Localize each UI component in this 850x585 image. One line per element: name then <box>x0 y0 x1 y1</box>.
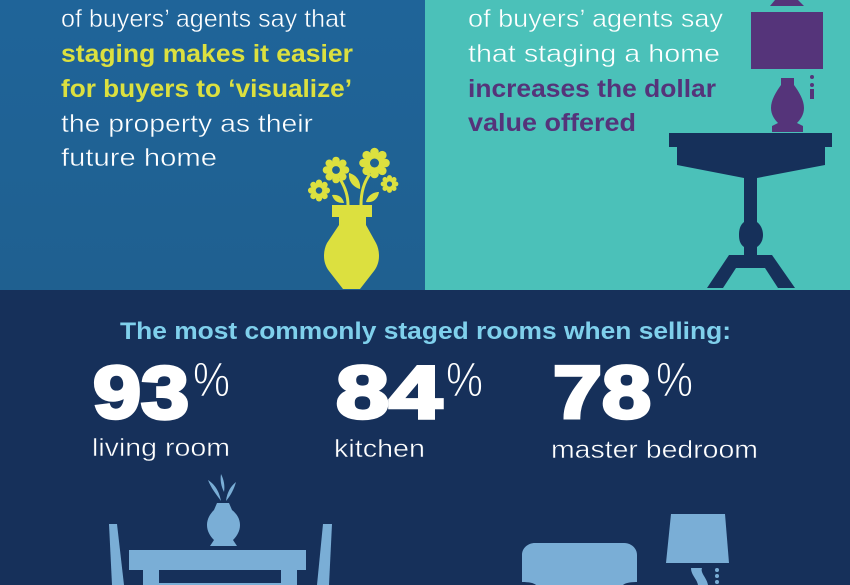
icon: flower large <box>359 148 390 178</box>
icon: flower left <box>308 179 330 202</box>
stat: living room: 93 <box>93 351 189 434</box>
text block: visualize statement: for buyers to ‘visualize’ <box>61 75 352 103</box>
stat: master bedroom: % <box>656 354 693 407</box>
stat: living room <box>92 351 230 462</box>
stat: master bedroom: 78 <box>553 351 651 434</box>
text block: visualize statement: future home <box>61 144 217 172</box>
icon: sofa and floor lamp <box>522 514 729 585</box>
icon: flower medium <box>323 157 349 183</box>
text block: dollar value statement: of buyers’ agents say <box>468 5 724 33</box>
heading: The most commonly staged rooms when selling: <box>120 318 731 345</box>
stat: kitchen: 84 <box>336 351 442 434</box>
text block: visualize statement <box>61 5 353 172</box>
text block: visualize statement: staging makes it easier <box>61 40 353 68</box>
stat: master bedroom: master bedroom <box>551 436 758 464</box>
text block: dollar value statement: that staging a home <box>468 40 720 68</box>
text block: dollar value statement: increases the dollar <box>468 75 716 103</box>
stat: living room: % <box>193 354 230 407</box>
stat: kitchen: kitchen <box>334 435 425 463</box>
panel: buyers visualize <box>0 0 425 290</box>
panel: most commonly staged rooms <box>92 318 758 585</box>
icon: flower right <box>381 175 398 193</box>
stat: kitchen <box>334 351 483 463</box>
stat: kitchen: % <box>446 354 483 407</box>
stat: living room: living room <box>92 434 230 462</box>
icon: navy side table <box>669 133 832 288</box>
icon: dining table with vase and chairs <box>109 474 332 585</box>
stat: master bedroom <box>551 351 758 464</box>
icon: purple table lamp <box>751 0 823 132</box>
text block: visualize statement: of buyers’ agents say that <box>61 5 346 33</box>
text block: dollar value statement <box>468 5 724 137</box>
text block: visualize statement: the property as their <box>61 110 313 138</box>
icon: yellow vase with flowers <box>308 148 398 289</box>
text block: dollar value statement: value offered <box>468 109 636 137</box>
panel: dollar value <box>425 0 850 290</box>
